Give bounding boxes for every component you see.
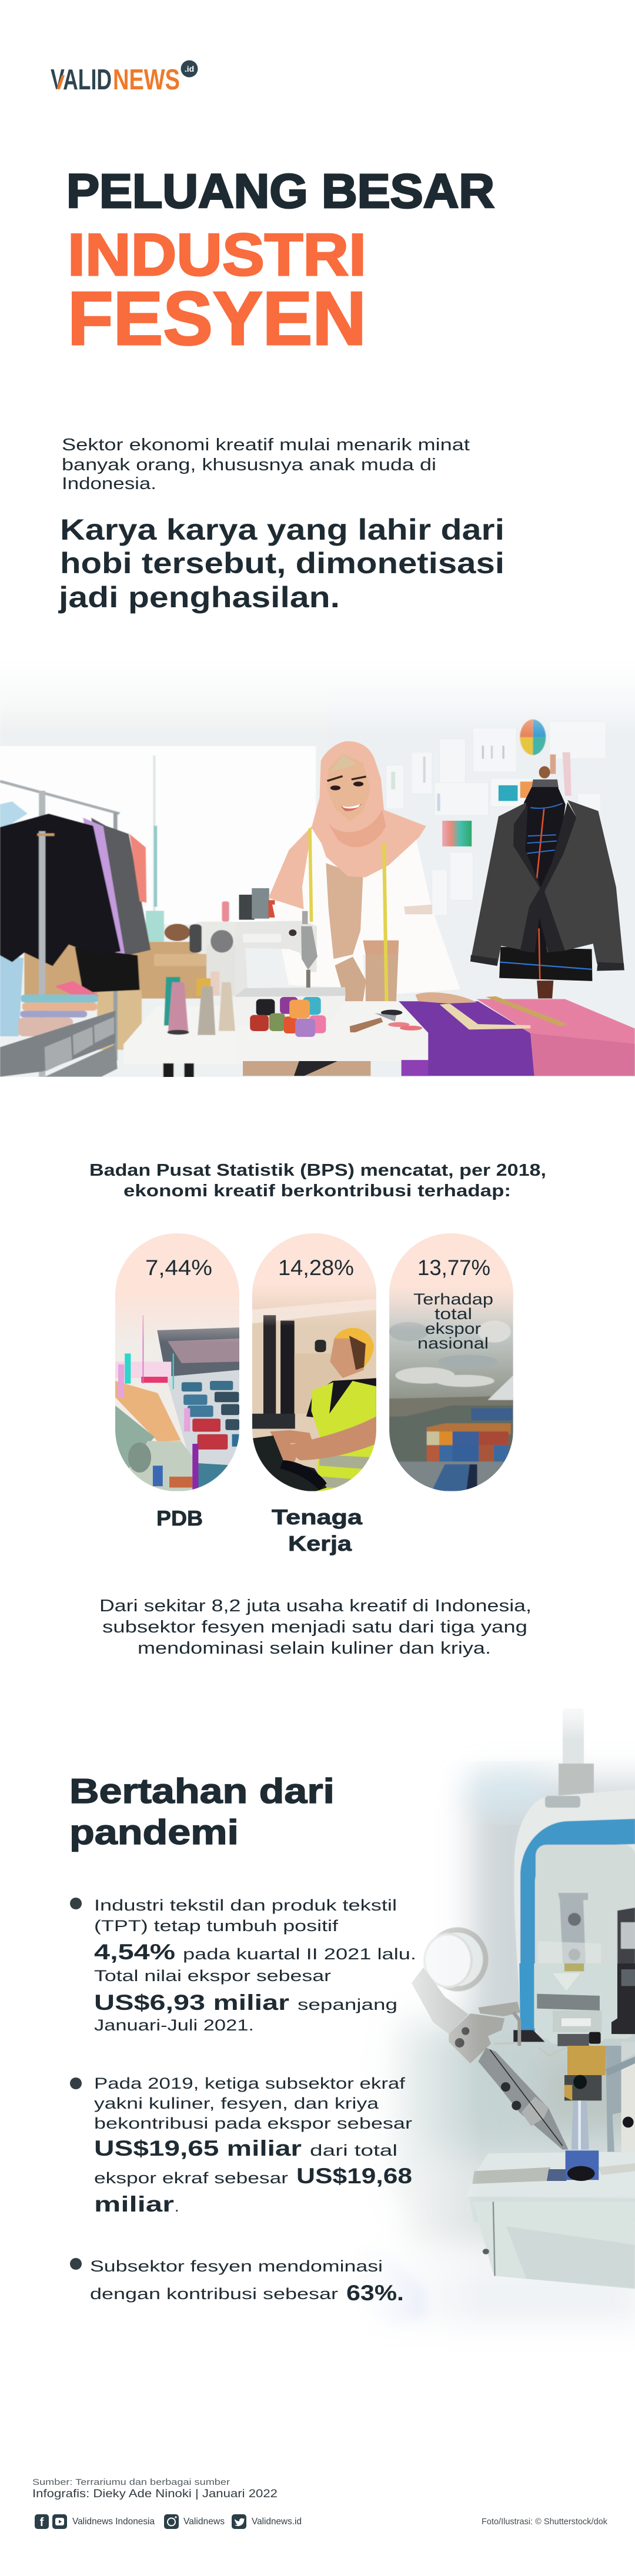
- social label: Validnews: Validnews: [183, 2517, 225, 2527]
- value 14,28%: 14,28%: [278, 1256, 354, 1280]
- section heading: Bertahan dari pandemi: Bertahan dari: [69, 1772, 335, 1811]
- title: [66, 165, 494, 361]
- intro text: [62, 436, 470, 493]
- dress: [326, 863, 363, 959]
- social label: Validnews Indonesia: Validnews Indonesia: [72, 2517, 155, 2527]
- value 7,44%: 7,44%: [145, 1256, 212, 1280]
- bullet 2: ekspor ekraf: dari total: [310, 2142, 397, 2159]
- footer credits: Sumber: Terrariumu dan berbagai sumber: [32, 2477, 230, 2487]
- lead statement: jadi penghasilan.: [58, 581, 340, 614]
- icon: instagram: [164, 2514, 179, 2529]
- bullet 2: ekspor ekraf: [70, 2075, 412, 2216]
- bullet 1: TPT: pada kuartal II 2021 lalu.: [183, 1945, 416, 1963]
- label: Tenaga Kerja: Tenaga: [272, 1505, 363, 1529]
- pill 2 peach fade: [252, 1233, 376, 1326]
- woman, table and mannequin: [235, 722, 635, 1076]
- needle mechanism: [412, 1963, 635, 2222]
- thread guide ring: [429, 1930, 486, 1989]
- statistics heading: [89, 1161, 546, 1200]
- icon: youtube: [52, 2514, 67, 2529]
- photo top fade: [0, 658, 635, 735]
- tools: [350, 1018, 383, 1032]
- mannequin: [537, 981, 553, 998]
- logo: Validnews.id: .id: [185, 64, 194, 73]
- bullet 1: TPT: US$6,93 miliar: [94, 1990, 289, 2015]
- colour wheel on wall: [520, 720, 546, 755]
- paragraph: usaha kreatif: [99, 1597, 532, 1658]
- paragraph: usaha kreatif: Dari sekitar 8,2 juta usaha kreatif di Indonesia,: [99, 1597, 532, 1615]
- paragraph: usaha kreatif: subsektor fesyen menjadi satu dari tiga yang: [102, 1618, 527, 1637]
- yarn balls: [256, 999, 275, 1015]
- bullet 2: ekspor ekraf: bekontribusi pada ekspor sebesar: [94, 2115, 412, 2132]
- logo: Validnews.id: VALID: [51, 64, 112, 96]
- caption: terhadap total ekspor nasional: ekspor: [425, 1320, 481, 1337]
- mannequin jacket: [470, 802, 541, 966]
- caption: terhadap total ekspor nasional: nasional: [417, 1334, 489, 1352]
- social label: Validnews.id: Validnews.id: [252, 2517, 302, 2527]
- label: PDB: PDB: [156, 1506, 203, 1530]
- sewing machine: [235, 921, 317, 996]
- intro text: Sektor ekonomi kreatif mulai menarik minat: [62, 436, 470, 454]
- face: [327, 753, 370, 821]
- hand: [416, 992, 477, 1003]
- panel: ekspor pill: [389, 1233, 513, 1491]
- bullet 1: TPT: 4,54%: [94, 1940, 175, 1964]
- photo: fashion designer in studio: [0, 702, 635, 1077]
- bullet 1: TPT: (TPT) tetap tumbuh positif: [94, 1917, 339, 1935]
- label: Tenaga Kerja: Kerja: [288, 1531, 352, 1555]
- title: FESYEN: [68, 276, 366, 361]
- shelf items: [239, 895, 255, 919]
- bullet 2: ekspor ekraf: Pada 2019, ketiga subsektor ekraf: [94, 2075, 406, 2092]
- fading bracket: [412, 1968, 469, 2034]
- footer credits: [32, 2477, 278, 2500]
- icon: twitter: [232, 2514, 246, 2529]
- right steel post: [606, 2046, 621, 2160]
- bullet 3: dominasi fesyen: Subsektor fesyen mendominasi: [90, 2257, 383, 2275]
- bullet 1: TPT: [70, 1896, 416, 2034]
- bullet 2: ekspor ekraf: miliar: [94, 2192, 174, 2216]
- bullet 1: TPT: Januari-Juli 2021.: [94, 2016, 254, 2034]
- footer social links: [35, 2514, 302, 2529]
- lead statement: hobi tersebut, dimonetisasi: [60, 547, 504, 580]
- statistics heading: Badan Pusat Statistik (BPS) mencatat, per 2018,: [89, 1161, 546, 1180]
- icon: facebook: f: [40, 2516, 44, 2529]
- bullet 1: TPT: Industri tekstil dan produk tekstil: [94, 1896, 397, 1914]
- pill 1 peach fade: [115, 1233, 239, 1343]
- bullet 2: ekspor ekraf: .: [175, 2197, 179, 2215]
- bullet 2: ekspor ekraf: yakni kuliner, fesyen, dan kriya: [94, 2095, 379, 2112]
- rulers: [440, 1003, 530, 1029]
- bullet 2: ekspor ekraf: US$19,68: [296, 2164, 412, 2188]
- body bottom: [519, 1963, 521, 2019]
- machine cabinet: [473, 2202, 635, 2289]
- bullet 2: ekspor ekraf: US$19,65 miliar: [94, 2136, 302, 2160]
- value 13,77%: 13,77%: [417, 1256, 490, 1280]
- wall sketches: [581, 805, 596, 810]
- paragraph: usaha kreatif: mendominasi selain kuliner dan kriya.: [138, 1639, 491, 1658]
- caption: terhadap total ekspor nasional: Terhadap: [413, 1290, 493, 1308]
- lead statement: [58, 513, 504, 614]
- logo: Validnews.id: [51, 60, 198, 96]
- table top: [466, 2152, 635, 2197]
- caption: terhadap total ekspor nasional: [413, 1290, 493, 1352]
- intro text: Indonesia.: [62, 474, 156, 493]
- left, top and bottom fades: [329, 1693, 482, 2375]
- ribbon fabric: [403, 2281, 424, 2317]
- lead statement: Karya karya yang lahir dari: [60, 513, 504, 546]
- bullet 1: TPT: Total nilai ekspor sebesar: [94, 1967, 331, 1985]
- bullet 3: dominasi fesyen: [70, 2257, 404, 2305]
- section heading: Bertahan dari pandemi: [69, 1772, 335, 1852]
- photo: sewing machine: [392, 1709, 635, 2324]
- hijab: [269, 741, 426, 909]
- bullet 2: ekspor ekraf: ekspor ekraf sebesar: [94, 2169, 288, 2187]
- machine head: [425, 1708, 635, 2039]
- panel: PDB pill: [115, 1233, 239, 1491]
- white blouse: [272, 831, 460, 1001]
- section heading: Bertahan dari pandemi: pandemi: [69, 1813, 239, 1852]
- logo: Validnews.id: NEWS: [113, 64, 180, 96]
- gold needle bar: [567, 2046, 606, 2075]
- title: PELUANG BESAR: [66, 165, 494, 218]
- measuring tape: [310, 828, 312, 922]
- panel: Tenaga Kerja pill: [252, 1233, 376, 1491]
- caption: terhadap total ekspor nasional: total: [435, 1305, 472, 1323]
- icon: facebook: [35, 2514, 49, 2529]
- photo credit: Foto/Ilustrasi: © Shutterstock/dok: [482, 2517, 607, 2527]
- bullet 1: TPT: sepanjang: [298, 1996, 397, 2013]
- table: [235, 1001, 400, 1031]
- bullet 3: dominasi fesyen: dengan kontribusi sebesar: [90, 2285, 338, 2303]
- statistics heading: ekonomi kreatif berkontribusi terhadap:: [123, 1182, 511, 1200]
- pill 3 peach fade: [389, 1233, 513, 1330]
- footer credits: Infografis: Dieky Ade Ninoki | Januari 2022: [32, 2488, 278, 2500]
- title: INDUSTRI: [68, 222, 366, 288]
- bullet 3: dominasi fesyen: 63%.: [346, 2281, 404, 2305]
- blurred studio background: [365, 1775, 635, 2334]
- intro text: banyak orang, khususnya anak muda di: [62, 456, 436, 474]
- label: Tenaga Kerja: [272, 1505, 363, 1555]
